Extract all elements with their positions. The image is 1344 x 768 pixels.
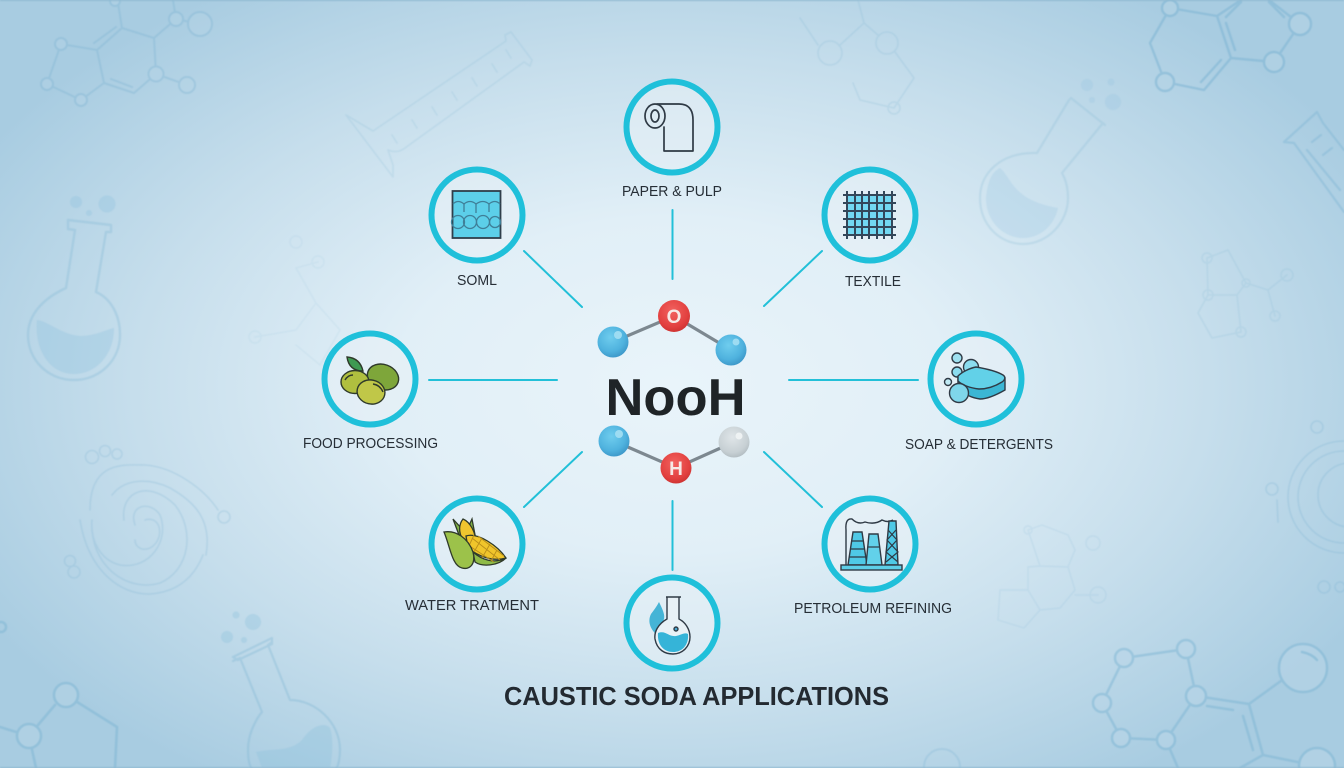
connector: food (429, 379, 557, 381)
swirl: right edge (1266, 421, 1344, 593)
label: WATER TRATMENT (405, 598, 539, 614)
icon: cells (452, 191, 500, 238)
ring (432, 170, 522, 260)
atom: H (660, 452, 692, 484)
application: water treatment (405, 498, 539, 614)
atom: H: H (669, 459, 683, 480)
molecule: centre left faint (249, 236, 340, 365)
edge line: top (0, 0, 1344, 1)
bond lines (613, 316, 734, 468)
label: PAPER & PULP (622, 184, 722, 200)
centre molecule: NooH (598, 300, 750, 484)
icon: olives (341, 357, 402, 407)
icon: woven grid (843, 191, 896, 239)
title: CAUSTIC SODA APPLICATIONS (504, 681, 889, 711)
connector: textile (764, 251, 822, 306)
atom: gray (718, 426, 750, 458)
application: chemical flask (626, 578, 718, 668)
connectors from centre to applications (429, 210, 918, 570)
connector: bottom flask (672, 501, 674, 570)
formula: NooH (606, 369, 746, 427)
icon: soap bar with bubbles (944, 353, 1005, 402)
ring (824, 498, 916, 590)
ring (626, 578, 718, 668)
icon: refinery (841, 519, 902, 570)
atom: blue bottom left (598, 426, 630, 456)
ring (432, 498, 522, 590)
atom: O (658, 300, 690, 332)
label: SOAP & DETERGENTS (905, 437, 1053, 453)
ring (626, 82, 718, 172)
label: FOOD PROCESSING (303, 436, 438, 452)
bubble: bottom centre (924, 749, 960, 768)
molecule: top centre faint (800, 0, 914, 114)
molecule: bottom right (1093, 640, 1335, 768)
label: PETROLEUM REFINING (794, 601, 952, 617)
molecule: top right (1150, 0, 1311, 91)
connector: water (524, 452, 582, 507)
flask: top right (980, 78, 1121, 244)
icon: corn (444, 519, 506, 568)
atom: O: O (667, 307, 681, 328)
application: textile (824, 170, 916, 290)
label: SOML (457, 273, 497, 289)
molecule: right faint (1198, 250, 1293, 338)
flask: bottom (221, 612, 340, 768)
application: soml (432, 170, 522, 289)
connector: soap (789, 379, 918, 381)
connector: soml (524, 251, 582, 307)
connector: paper (672, 210, 674, 279)
icon: paper roll (645, 104, 693, 151)
connector: petroleum (764, 452, 822, 507)
application: soap & detergents (905, 334, 1053, 453)
molecule: top left (41, 0, 212, 106)
ring (824, 170, 916, 260)
icon: flask with drop (649, 597, 690, 654)
molecule: bottom left (0, 622, 117, 768)
swirl: left (64, 446, 230, 594)
atom: blue top left (598, 326, 628, 358)
application: food processing (303, 334, 438, 452)
application: petroleum refining (794, 498, 952, 617)
edge line: bottom (0, 767, 1344, 768)
application: paper & pulp (622, 82, 722, 200)
flask: left (28, 196, 120, 380)
test tube: top (346, 32, 532, 177)
label: TEXTILE (845, 274, 901, 290)
molecule: bottom centre right faint (998, 525, 1106, 628)
ring (930, 334, 1022, 424)
test tube: right edge (1284, 112, 1344, 212)
ring (324, 334, 416, 424)
atom: blue top right (716, 334, 746, 366)
